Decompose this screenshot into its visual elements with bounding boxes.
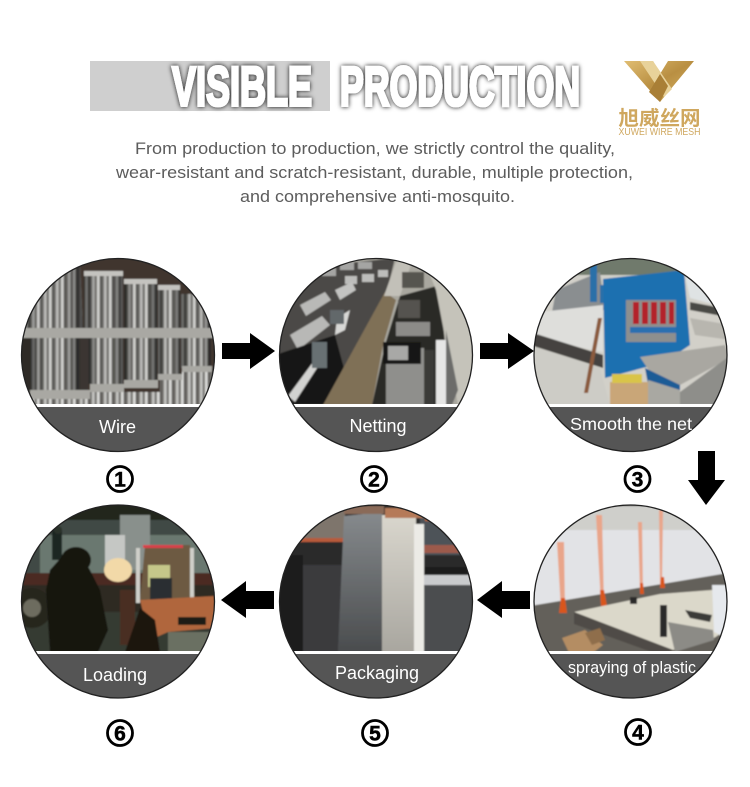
- caption: spraying of plastic: [568, 658, 696, 677]
- logo: [618, 61, 700, 138]
- photo: netting workshop: [280, 259, 472, 451]
- arrow: step 2 to 3: [480, 333, 534, 369]
- step number 4: [626, 720, 650, 744]
- caption: Loading: [83, 665, 147, 685]
- logo chinese name: 旭威丝网: [618, 107, 700, 130]
- step number 5: 5: [369, 722, 381, 746]
- circle outline: [534, 505, 727, 698]
- circle outline: [22, 505, 214, 698]
- intro text: From production to production, we strictly control the quality,: [135, 139, 615, 158]
- intro text: wear-resistant and scratch-resistant, durable, multiple protection,: [115, 163, 633, 182]
- title grey band: [90, 61, 330, 111]
- panel: step 2 netting: [275, 255, 480, 457]
- caption band: [294, 651, 458, 698]
- panel: step 6 loading: [20, 504, 216, 699]
- step number 2: 2: [368, 468, 380, 492]
- logo english name: XUWEI WIRE MESH: [618, 127, 700, 138]
- caption band: [548, 651, 712, 698]
- caption band: [294, 404, 458, 451]
- step number 1: [108, 466, 132, 492]
- step number 3: [625, 466, 650, 492]
- arrow: step 4 to 5: [477, 581, 530, 618]
- caption: Netting: [349, 416, 407, 436]
- circle outline: [22, 258, 214, 452]
- step number 3: 3: [632, 468, 643, 492]
- circle outline: [280, 258, 472, 452]
- photo: forklift loading: [22, 506, 214, 698]
- icon: gold W mark: [624, 61, 694, 102]
- caption: Packaging: [335, 663, 419, 683]
- title text: VISIBLE: [172, 54, 312, 118]
- intro text: and comprehensive anti-mosquito.: [240, 187, 515, 206]
- caption band: [36, 404, 200, 451]
- step number 6: [108, 720, 132, 746]
- panel: step 1 wire: [20, 258, 216, 452]
- title text: [172, 54, 580, 118]
- panel: step 4 spraying of plastic: [530, 500, 734, 704]
- photo: plastic spraying room: [534, 506, 726, 698]
- photo: wrapped mesh roll: [280, 506, 472, 698]
- intro text: [115, 139, 633, 206]
- circle outline: [534, 258, 727, 452]
- photo: wire spools: [22, 259, 214, 451]
- step number 2: [362, 466, 386, 492]
- panel: step 5 packaging: [275, 500, 479, 704]
- caption band: [36, 651, 200, 698]
- step number 1: 1: [114, 468, 126, 492]
- caption: Wire: [99, 417, 136, 437]
- circle outline: [280, 505, 472, 698]
- step number 5: [362, 720, 388, 746]
- photo: flattening machine: [534, 259, 726, 451]
- arrow: step 1 to 2: [222, 333, 275, 369]
- caption band: [548, 404, 713, 451]
- arrow: step 5 to 6: [221, 581, 274, 618]
- step number 6: 6: [114, 722, 126, 746]
- panel: step 3 smooth the net: [530, 255, 735, 457]
- title banner: [90, 54, 580, 118]
- arrow: step 3 to 4: [688, 451, 725, 505]
- step number 4: 4: [632, 722, 644, 744]
- caption: Smooth the net: [570, 414, 692, 434]
- title text: PRODUCTION: [340, 54, 580, 118]
